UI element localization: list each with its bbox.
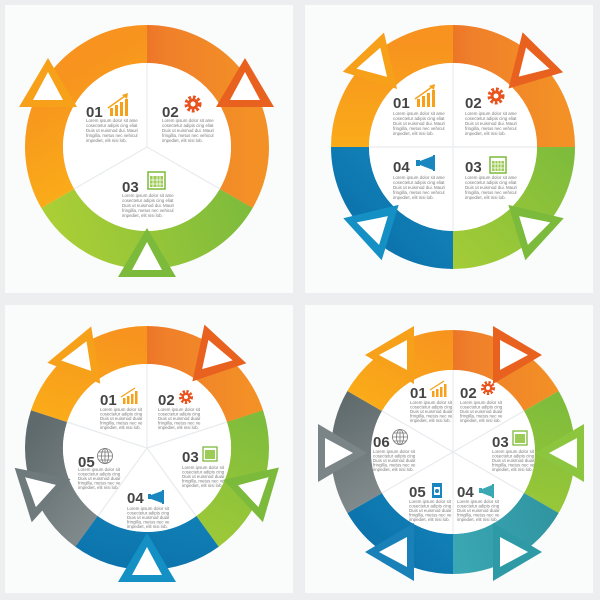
step 05 [78,448,121,490]
step 03: Lorem ipsum dolor sit [182,465,225,470]
step 02: Duis ut euismod duiar [460,409,503,414]
step 03 [182,447,225,488]
step 01: Lorem ipsum dolor sit ame [86,118,138,123]
step 01 [86,93,138,143]
step 04 [457,484,500,522]
step 01: 01 [86,104,103,121]
step 05: impediet, elit nisi lob. [78,485,119,490]
panel: 4-step cycle [305,5,593,293]
step 03: Duis ut euismod duiar [182,474,225,479]
step 04: cosectetur adipis cing eliat [393,180,445,185]
step 02: fringilla, metus nec ve [158,420,201,426]
step 05: 05 [409,484,426,501]
step 02: impediet, elit nisi lob. [158,425,199,430]
step 01: cosectetur adipis cing eliat [86,123,138,128]
step 02 [460,383,503,423]
step 03: fringilla, metus nec vehicul [465,190,517,195]
step 06: Lorem ipsum dolor sit [373,449,416,454]
step 04 [127,490,170,529]
step 02 [162,98,214,143]
step 06: impediet, elit nisi lob. [373,467,414,472]
step 03: impediet, elit nisi lob. [182,483,223,488]
step 03: Lorem ipsum dolor sit [492,449,535,454]
ring: 5 segments [3,304,291,592]
step 04: Lorem ipsum dolor sit [127,506,170,511]
step 04: Lorem ipsum dolor sit ame [393,175,445,180]
step 05: Duis ut euismod duiar [409,508,452,513]
step 04: cosectetur adipis cing [127,510,170,516]
step 03: fringilla, metus nec ve [182,478,225,484]
step 03 [122,172,174,218]
step 01: Lorem ipsum dolor sit [100,407,143,412]
step 02: impediet, elit nisi lob. [465,131,506,136]
step 03: Lorem ipsum dolor sit ame [122,193,174,198]
step 01: fringilla, metus nec ve [100,420,143,426]
step 03: Lorem ipsum dolor sit ame [465,175,517,180]
step 04: 04 [127,490,144,507]
step 01: Lorem ipsum dolor sit ame [393,111,445,116]
step 02: Lorem ipsum dolor sit [460,400,503,405]
step 03: fringilla, metus nec ve [492,462,535,468]
arrows [19,58,274,277]
step 04: fringilla, metus nec vehicul [393,190,445,195]
step 04: Duis ut euismod dui. Mauri [393,185,445,190]
step 01: fringilla, metus nec vehicul [86,133,138,138]
step 01: Lorem ipsum dolor sit [410,400,453,405]
step 03: 03 [465,159,482,176]
step 06: cosectetur adipis cing [373,454,416,458]
step 03 [492,431,535,472]
panel: 5-step cycle [0,304,299,593]
step 02 [465,90,517,136]
step 04: Duis ut euismod duiar [127,515,170,520]
step 05: Duis ut euismod duiar [78,476,121,481]
panel: 3-step cycle [5,5,293,293]
step 06: fringilla, metus nec ve [373,462,416,468]
step 02: impediet, elit nisi lob. [162,138,203,143]
step 01: cosectetur adipis cing [410,404,453,410]
step 01 [393,84,445,136]
arrows [0,325,299,582]
step 06: Duis ut euismod duiar [373,458,416,463]
step 02: cosectetur adipis cing [158,412,201,416]
step 06: 06 [373,434,390,451]
step 02: Lorem ipsum dolor sit ame [162,118,214,123]
step 02: 02 [460,385,477,402]
step 05: cosectetur adipis cing [409,504,452,508]
step 02: fringilla, metus nec ve [460,414,503,418]
step 04: 04 [393,159,410,176]
step 04: impediet, elit nisi lob. [457,517,498,522]
step 04: Lorem ipsum dolor sit [457,499,500,504]
step 05: Lorem ipsum dolor sit [409,499,452,504]
step 04: 04 [457,484,474,501]
step 02: impediet, elit nisi lob. [460,418,501,423]
step 06 [373,430,416,472]
step 01: 01 [100,392,117,409]
step 03: 03 [492,434,509,451]
step 03: Duis ut euismod dui. Mauri [122,203,174,208]
step 02: Lorem ipsum dolor sit [158,407,201,412]
step 02: Duis ut euismod dui. Mauri [162,128,214,133]
step 02: Duis ut euismod dui. Mauri [465,121,517,126]
step 01: Duis ut euismod duiar [100,416,143,421]
step 03: impediet, elit nisi lob. [492,467,533,472]
step 02: Lorem ipsum dolor sit ame [465,111,517,116]
ring: 6 segments [314,313,592,591]
step 04: impediet, elit nisi lob. [127,524,168,529]
step 01: fringilla, metus nec ve [410,414,453,418]
step 02: fringilla, metus nec vehicul [162,133,214,138]
step 01: cosectetur adipis cing eliat [393,116,445,121]
step 01: impediet, elit nisi lob. [86,138,127,143]
arrows [335,32,572,260]
step 02: fringilla, metus nec vehicul [465,126,517,131]
step 01 [100,388,143,430]
step 01: impediet, elit nisi lob. [393,131,434,136]
step 03: impediet, elit nisi lob. [122,213,163,218]
step 02: 02 [158,392,175,409]
step 01: Duis ut euismod dui. Mauri [393,121,445,126]
step 01 [410,381,453,423]
step 03: cosectetur adipis cing [492,454,535,458]
step 02: 02 [465,95,482,112]
step 02: Duis ut euismod duiar [158,416,201,421]
step 01: 01 [410,385,427,402]
step 01: impediet, elit nisi lob. [100,425,141,430]
step 05: impediet, elit nisi lob. [409,517,450,522]
step 04: impediet, elit nisi lob. [393,195,434,200]
step 03: impediet, elit nisi lob. [465,195,506,200]
ring: 3 segments [6,6,288,288]
step 05: fringilla, metus nec ve [409,512,452,518]
step 02: cosectetur adipis cing eliat [465,116,517,121]
step 03: 03 [122,179,139,196]
step 05: fringilla, metus nec ve [78,480,121,486]
step 05: cosectetur adipis cing [78,472,121,476]
step 01: impediet, elit nisi lob. [410,418,451,423]
step 05: 05 [78,454,95,471]
step 03: cosectetur adipis cing eliat [465,180,517,185]
step 01: Duis ut euismod duiar [410,409,453,414]
step 01: 01 [393,95,410,112]
step 04: fringilla, metus nec ve [457,512,500,518]
step 05: Lorem ipsum dolor sit [78,467,121,472]
step 01: cosectetur adipis cing [100,412,143,416]
step 04 [393,155,445,200]
step 05 [409,483,452,522]
step 04: fringilla, metus nec ve [127,520,170,524]
step 03: cosectetur adipis cing [182,470,225,474]
step 02: cosectetur adipis cing [460,404,503,410]
step 03 [465,157,517,200]
arrows [318,326,584,581]
step 03: Duis ut euismod duiar [492,458,535,463]
step 03: 03 [182,449,199,466]
step 02 [158,392,201,430]
panel: 6-step cycle [305,305,593,593]
step 02: cosectetur adipis cing eliat [162,123,214,128]
step 03: fringilla, metus nec vehicul [122,208,174,213]
step 01: Duis ut euismod dui. Mauri [86,128,138,133]
step 04: Duis ut euismod duiar [457,508,500,513]
ring: 4 segments [350,44,556,250]
step 02: 02 [162,104,179,121]
step 01: fringilla, metus nec vehicul [393,126,445,131]
step 03: cosectetur adipis cing eliat [122,198,174,203]
step 04: cosectetur adipis cing [457,504,500,508]
step 03: Duis ut euismod dui. Mauri [465,185,517,190]
